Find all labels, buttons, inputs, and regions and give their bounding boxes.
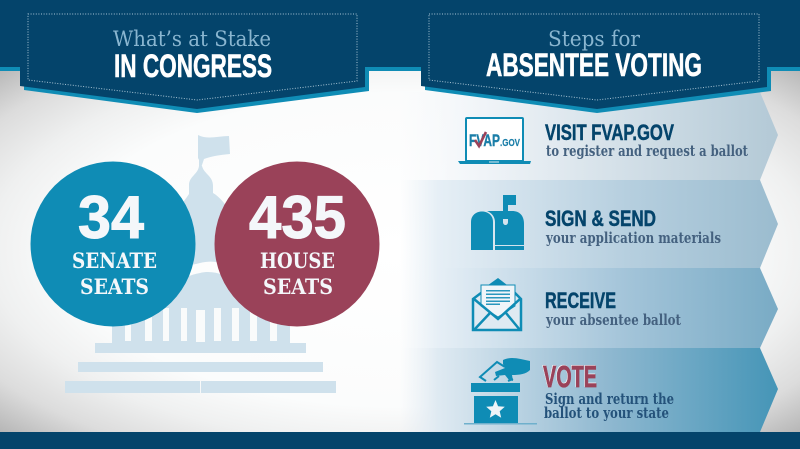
step 1 text: VISIT FVAP.GOV [545,120,674,145]
base [95,343,306,353]
row 2 background [400,180,778,268]
flag [198,135,230,168]
capitol illustration [65,135,336,393]
row 3 background [400,268,778,348]
row 1 background [400,92,778,180]
banner: what's at stake in congress [20,14,369,113]
heading line 2: ABSENTEE VOTING [486,47,702,83]
step 4 text: ballot to your state [544,405,669,422]
house circle [214,162,380,326]
lower dome and pediment [160,272,270,308]
row 4 background [400,348,778,432]
step rows [400,92,778,432]
step 2 text: SIGN & SEND [545,206,656,231]
icon: laptop with fvap.gov: FVAP [469,131,500,150]
top band [0,0,800,71]
colonnade [112,308,290,343]
icon: mailbox [471,195,524,250]
senate label: SENATE [72,248,157,273]
footer band [0,432,800,449]
heading line 1: Steps for [548,27,641,51]
senate label line 2: SEATS [80,274,149,299]
dome [176,166,232,270]
step 3 text [545,288,681,329]
step 2 text: your application materials [545,230,721,247]
icon: ballot box [464,358,537,424]
step 4 text: Sign and return the [545,391,674,408]
senate number: 34 [78,184,145,251]
middle step [78,362,323,372]
house label: HOUSE [260,248,335,273]
heading line 2: IN CONGRESS [114,48,272,84]
step 2 text [545,206,721,247]
step 1 text: to register and request a ballot [546,143,748,160]
icon: laptop with fvap.gov [458,118,531,164]
heading line 1: What’s at Stake [113,27,271,51]
banner: steps for absentee voting [421,14,771,113]
step 3 text: RECEIVE [545,288,616,313]
house label line 2: SEATS [263,274,333,299]
step 4 text [542,358,674,422]
column gaps [125,308,277,342]
step 4 text: VOTE [542,358,596,394]
icon: envelope [473,278,521,330]
house number: 435 [249,184,346,251]
step 3 text: your absentee ballot [545,312,681,329]
bottom step left [65,381,200,393]
senate circle [30,162,196,326]
icon: laptop with fvap.gov: .GOV [500,138,520,149]
step 4 text: VOTE [543,359,597,394]
step 1 text [545,120,748,160]
bottom step right [201,381,336,393]
